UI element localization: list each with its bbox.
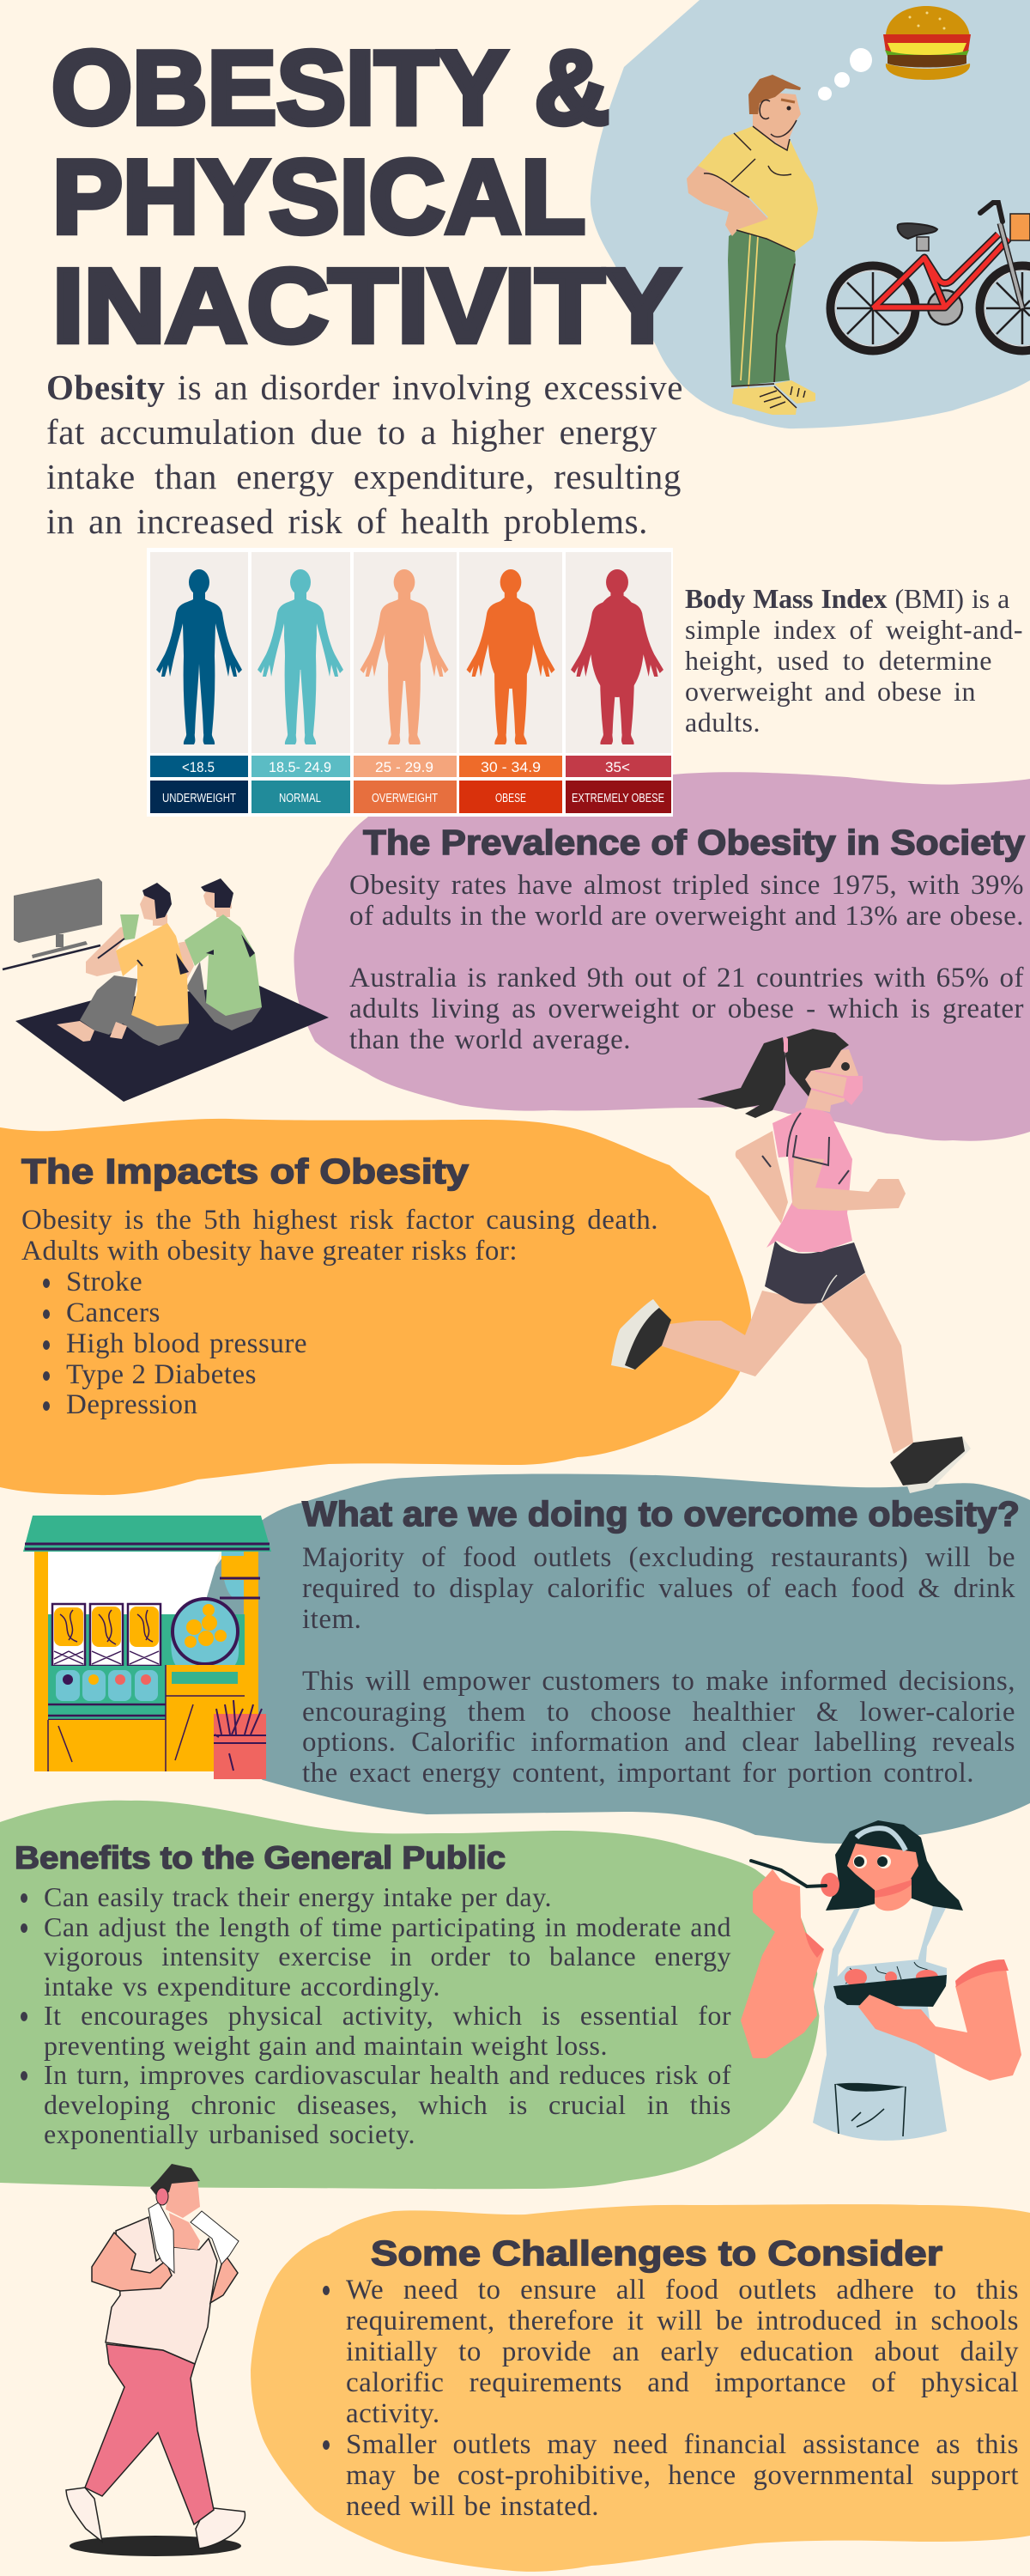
icon: walking woman with towel <box>66 2164 245 2556</box>
BMI ranges: 30 - 34.9 <box>481 759 541 775</box>
overcome text: the exact energy content, important for portion control. <box>302 1758 974 1789</box>
benefits text: intake vs expenditure accordingly. <box>44 1970 440 2001</box>
overcome text: Majority of food outlets (excluding restaurants) will be <box>302 1542 1015 1573</box>
BMI chart <box>147 548 673 817</box>
challenges text: We need to ensure all food outlets adhere to this <box>346 2275 1019 2306</box>
title <box>52 29 680 364</box>
intro paragraph: intake than energy expenditure, resulting <box>46 457 682 496</box>
BMI ranges <box>150 756 671 777</box>
challenges text: activity. <box>346 2398 440 2429</box>
blob: teal action panel <box>172 1473 1030 1844</box>
challenges text: requirement, therefore it will be introduced in schools <box>346 2306 1019 2336</box>
blob: green benefits panel <box>0 1801 820 2189</box>
overcome text: encouraging them to choose healthier & lower-calorie <box>302 1697 1015 1728</box>
icon: running woman <box>611 1029 971 1493</box>
BMI description: Body Mass Index (BMI) is a <box>685 583 1009 614</box>
BMI categories <box>150 781 671 813</box>
impacts text: Adults with obesity have greater risks for: <box>21 1236 518 1267</box>
benefits text: Can easily track their energy intake per day. <box>44 1881 552 1912</box>
intro paragraph <box>46 368 683 541</box>
BMI ranges: 35< <box>605 759 630 775</box>
impacts text: Cancers <box>66 1297 161 1328</box>
silhouette: overweight <box>360 569 448 744</box>
heading: impacts: The Impacts of Obesity <box>21 1151 469 1191</box>
silhouette: obese <box>467 569 554 744</box>
impacts text: Depression <box>66 1389 197 1420</box>
silhouette: extremely obese <box>571 569 663 744</box>
icon: woman eating salad <box>741 1820 1021 2141</box>
BMI categories: OBESE <box>495 791 526 805</box>
benefits text <box>21 1881 731 2149</box>
intro paragraph: in an increased risk of health problems. <box>46 501 648 541</box>
challenges text: calorific requirements and importance of physical <box>346 2367 1019 2398</box>
challenges text: may be cost-prohibitive, hence governmental support <box>346 2460 1019 2491</box>
blob: purple prevalence panel <box>294 772 1030 1141</box>
heading: overcome: What are we doing to overcome obesity? <box>302 1494 1020 1534</box>
overcome text <box>302 1542 1015 1789</box>
title: INACTIVITY <box>52 247 680 364</box>
icon: food stall <box>23 1516 271 1779</box>
BMI ranges: 18.5- 24.9 <box>269 759 331 775</box>
BMI categories: OVERWEIGHT <box>372 791 438 805</box>
BMI ranges: 25 - 29.9 <box>375 759 433 775</box>
BMI categories: EXTREMELY OBESE <box>572 791 664 805</box>
impacts text: High blood pressure <box>66 1328 307 1359</box>
heading: benefits: Benefits to the General Public <box>15 1840 506 1875</box>
icon: couple at a computer on a rug <box>3 878 329 1102</box>
prevalence text: Australia is ranked 9th out of 21 countries with 65% of <box>349 963 1024 993</box>
prevalence text: adults living as overweight or obese - which is greater <box>349 993 1024 1024</box>
benefits text: vigorous intensity exercise in order to balance energy <box>44 1941 731 1971</box>
intro paragraph: fat accumulation due to a higher energy <box>46 412 657 452</box>
BMI description <box>685 583 1023 738</box>
blob: orange impacts panel <box>0 1119 751 1495</box>
overcome text: required to display calorific values of each food & drink <box>302 1573 1015 1604</box>
title: OBESITY & <box>52 29 609 146</box>
impacts text: Stroke <box>66 1267 142 1297</box>
blob: light orange challenges panel <box>251 2204 1030 2572</box>
icon: red bicycle <box>831 203 1030 350</box>
benefits text: exponentially urbanised society. <box>44 2118 415 2149</box>
impacts text: Type 2 Diabetes <box>66 1359 257 1390</box>
BMI categories: NORMAL <box>279 791 321 805</box>
icon: burger <box>883 6 971 80</box>
prevalence text: Obesity rates have almost tripled since 1975, with 39% <box>349 870 1024 901</box>
prevalence text: than the world average. <box>349 1024 631 1055</box>
challenges text: Smaller outlets may need financial assistance as this <box>346 2429 1019 2460</box>
silhouette: underweight <box>156 569 242 744</box>
BMI description: adults. <box>685 707 760 738</box>
BMI description: height, used to determine <box>685 645 992 676</box>
challenges text: need will be instated. <box>346 2491 599 2522</box>
icon: man with yellow shirt <box>687 75 818 415</box>
prevalence text <box>349 870 1024 1055</box>
challenges text <box>323 2275 1019 2522</box>
BMI description: overweight and obese in <box>685 676 976 707</box>
icon: thought bubbles <box>818 48 872 100</box>
benefits text: In turn, improves cardiovascular health and reduces risk of <box>44 2059 731 2090</box>
benefits text: developing chronic diseases, which is crucial in this <box>44 2088 731 2119</box>
BMI categories: UNDERWEIGHT <box>162 791 236 805</box>
title: PHYSICAL <box>52 138 585 255</box>
benefits text: preventing weight gain and maintain weight loss. <box>44 2030 608 2061</box>
overcome text: item. <box>302 1604 361 1635</box>
BMI ranges: <18.5 <box>182 759 215 775</box>
impacts text <box>21 1205 658 1420</box>
prevalence text: of adults in the world are overweight and 13% are obese. <box>349 901 1024 932</box>
impacts text: Obesity is the 5th highest risk factor causing death. <box>21 1205 658 1236</box>
overcome text: This will empower customers to make informed decisions, <box>302 1666 1015 1697</box>
benefits text: Can adjust the length of time participating in moderate and <box>44 1911 731 1942</box>
benefits text: It encourages physical activity, which is essential for <box>44 2000 731 2031</box>
blob: blue header background <box>591 0 1030 428</box>
silhouette: normal <box>258 569 343 744</box>
heading: prevalence: The Prevalence of Obesity in Society <box>363 823 1025 862</box>
overcome text: options. Calorific information and clear labelling reveals <box>302 1727 1015 1758</box>
challenges text: initially to provide an early education about daily <box>346 2336 1019 2367</box>
intro paragraph: Obesity is an disorder involving excessive <box>46 368 683 407</box>
BMI description: simple index of weight-and- <box>685 614 1023 645</box>
heading: challenges: Some Challenges to Consider <box>371 2233 942 2273</box>
